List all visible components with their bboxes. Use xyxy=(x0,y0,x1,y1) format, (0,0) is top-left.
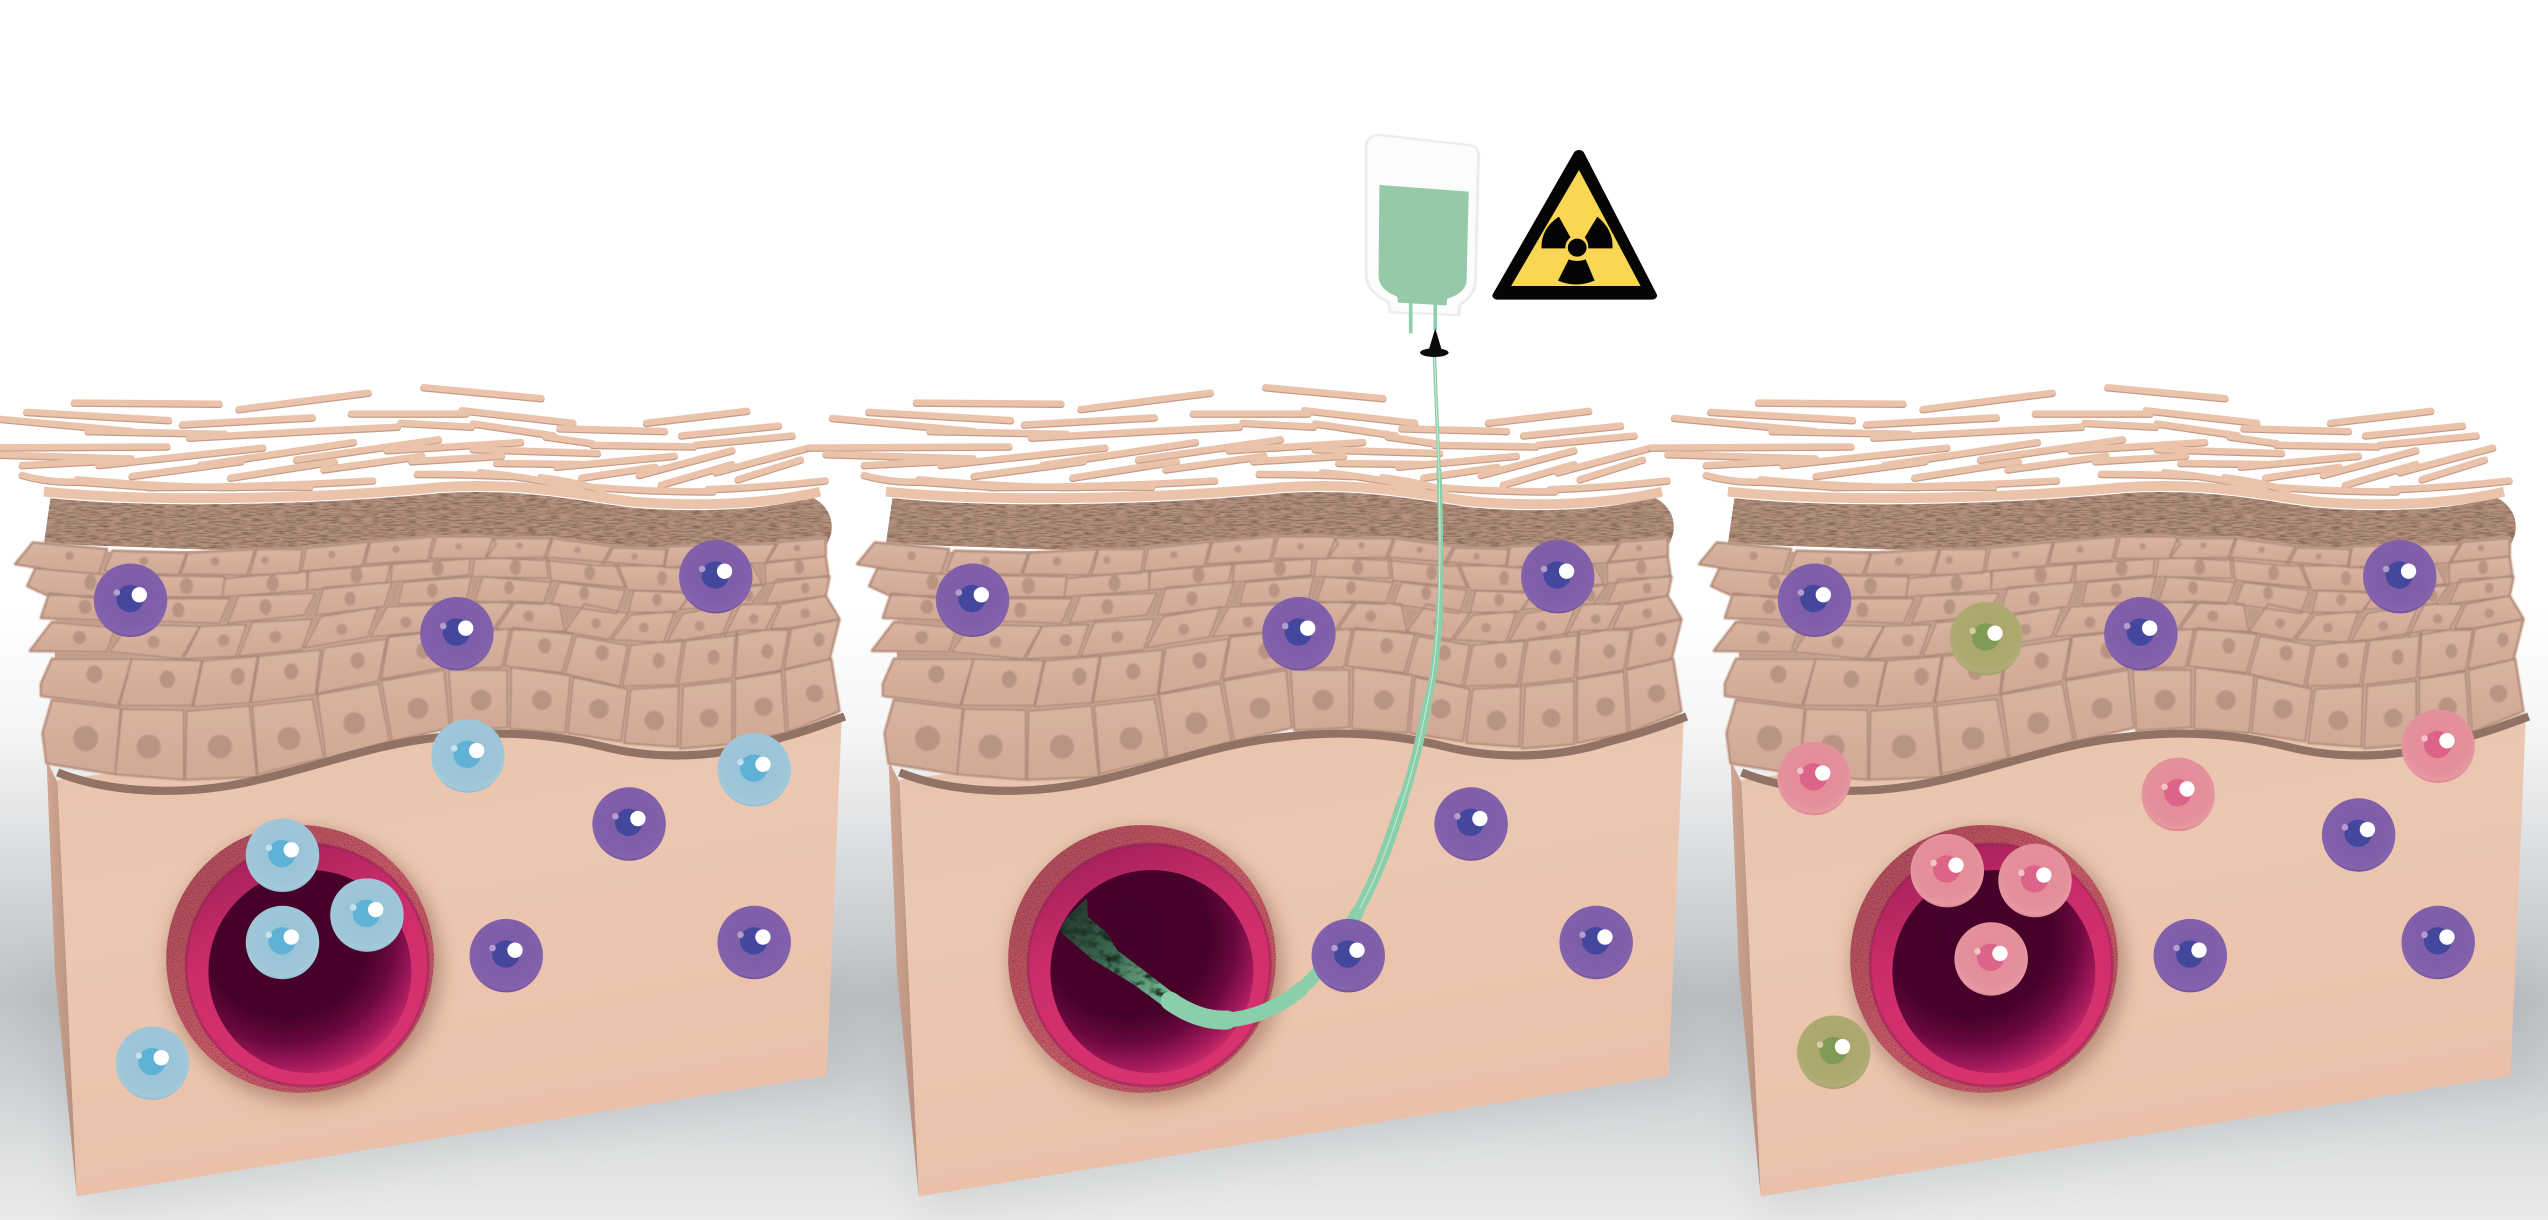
infusion tube xyxy=(1170,358,1441,1020)
purple cells xyxy=(936,540,1633,992)
blue cells xyxy=(116,719,791,1100)
catheter strand inside vessel xyxy=(1056,898,1172,1006)
purple cells xyxy=(94,540,791,992)
blood vessel xyxy=(166,825,442,1103)
blood vessel xyxy=(1008,825,1284,1103)
skin block: dermis, epidermis and flakes xyxy=(809,387,1703,1220)
pink cells xyxy=(1777,709,2475,996)
skin block: dermis, epidermis and flakes xyxy=(0,387,861,1220)
skin block: dermis, epidermis and flakes xyxy=(1651,387,2545,1220)
panel: middle skin section with catheter xyxy=(809,358,1703,1220)
icon: radiation warning sign xyxy=(1498,154,1652,296)
purple cells xyxy=(1778,540,2475,992)
panel: right skin section with pink and olive cells xyxy=(1651,387,2545,1220)
panel: left skin section with blue immune cells xyxy=(0,387,861,1220)
icon: infusion bag xyxy=(1366,135,1479,357)
olive cells xyxy=(1797,602,2023,1089)
blood vessel xyxy=(1850,825,2126,1103)
